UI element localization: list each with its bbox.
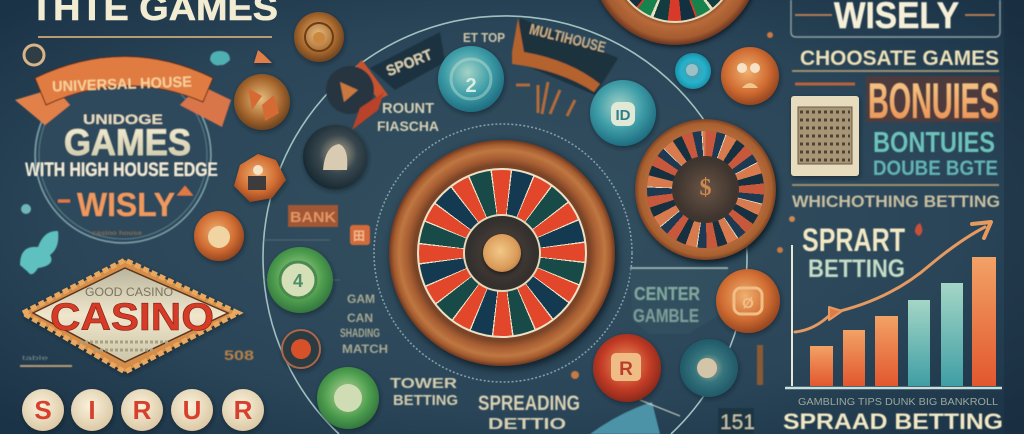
chip R2: R <box>234 395 253 425</box>
label: sprart betting: BETTING <box>808 255 905 283</box>
icon: teal marble left <box>438 46 504 112</box>
label: casino banner left: BANK <box>290 209 336 226</box>
icon: brown token <box>294 12 344 62</box>
icon: green marble: 4 <box>293 271 303 291</box>
chip S <box>22 389 64 431</box>
dark panel: sport <box>356 32 445 100</box>
hub <box>463 214 541 292</box>
chart: spread betting bars <box>785 216 1002 408</box>
main roulette wheel <box>389 140 615 366</box>
icon: orange marble <box>194 211 244 261</box>
top roulette wheel <box>591 0 759 45</box>
bars <box>810 257 996 386</box>
small caption left of sign <box>20 347 254 366</box>
chip R <box>121 389 163 431</box>
title: the games <box>24 0 278 65</box>
arrow: rising trend <box>795 222 991 332</box>
panel: choose games wisely: WITH HIGH HOUSE EDGE <box>25 160 218 181</box>
label: round fiascha <box>377 100 439 134</box>
callout: center gamble <box>630 268 728 334</box>
secondary roulette wheel <box>635 119 776 260</box>
small caption left of sign: 508 <box>224 347 254 363</box>
hub: $ <box>700 175 712 201</box>
panel: choose games wisely: UNIDOGE <box>83 111 163 127</box>
icon: casino marquee sign: GOOD CASINO <box>85 285 173 299</box>
icon: orange gem token <box>234 50 290 130</box>
right edge shade <box>1004 0 1024 434</box>
icon: orange chip <box>234 154 286 202</box>
label: spreading betting: DETTIO <box>488 416 566 433</box>
icon: teal marble right <box>590 80 656 146</box>
chip U: U <box>183 395 201 425</box>
icon: dark orange token <box>326 66 384 130</box>
panel: choose games wisely: WISLY <box>77 186 175 223</box>
streak and device bottom right: 151 <box>720 411 755 434</box>
ring panels and labels <box>264 18 783 434</box>
dark panel: sport: SPORT <box>384 46 435 80</box>
panel: choose games wisely: casino house <box>92 231 143 237</box>
label: et top: ET TOP <box>463 30 505 45</box>
icon: small orange square: 田 <box>353 229 365 243</box>
label: spreading betting: SPREADING <box>478 392 580 415</box>
icon: teal marble left: 2 <box>465 75 477 97</box>
ring marbles <box>267 46 780 429</box>
chip U <box>171 389 213 431</box>
wheel pockets <box>417 168 587 338</box>
icon: orange marble right: Ø <box>742 295 754 312</box>
label: tower betting: BETTING <box>393 392 458 409</box>
icon: green marble <box>267 247 333 313</box>
left ring stats: CAN <box>347 311 373 325</box>
marbles top left <box>194 12 344 261</box>
icon: red marble <box>593 334 661 402</box>
label: round fiascha: ROUNT <box>382 100 434 117</box>
label: casino banner left <box>288 205 338 227</box>
small label dots <box>571 32 783 379</box>
panel: wisely header <box>791 0 1000 211</box>
ribbon banner: UNIVERSAL HOUSE <box>52 74 192 95</box>
left ring stats <box>340 292 388 356</box>
icon: orange face marble <box>721 47 779 105</box>
icon: teal gems <box>20 51 230 274</box>
chip I <box>71 389 113 431</box>
panel: choose games wisely: GAMES <box>64 122 191 163</box>
hub <box>672 156 739 223</box>
chip R2 <box>222 389 264 431</box>
icon: casino marquee sign: CASINO <box>50 296 214 339</box>
chip R: R <box>133 395 152 425</box>
row of letter chips <box>22 389 264 431</box>
icon: small orange square <box>350 225 370 245</box>
chip I: I <box>88 395 96 425</box>
central large ring <box>263 16 747 434</box>
left ring stats: MATCH <box>342 342 388 356</box>
icon: green marble bottom <box>317 367 379 429</box>
icon: casino marquee sign <box>23 260 238 372</box>
panel: choose games wisely <box>15 56 231 243</box>
icon: small cyan marble <box>675 53 711 89</box>
icon: red ring token <box>282 330 320 368</box>
icon: dark marble <box>303 125 367 189</box>
panel: multichoice banner <box>512 18 618 95</box>
small caption left of sign: table <box>22 356 49 362</box>
icon: orange marble right <box>716 269 780 333</box>
scribble glyphs <box>516 82 575 116</box>
label: tower betting <box>390 375 458 409</box>
label: sprart betting: SPRART <box>802 222 905 258</box>
ribbon banner <box>15 56 231 127</box>
panel: multichoice banner: MULTIHOUSE <box>528 21 607 56</box>
footer heading: spread betting: SPRAAD BETTING <box>783 409 1003 434</box>
icon: teal marble right: ID <box>616 107 631 124</box>
chart caption: GAMBLING TIPS DUNK BIG BANKROLL <box>798 397 998 408</box>
label: sprart betting <box>802 222 905 283</box>
heading: betting strip: WHICHOTHING BETTING <box>792 192 1000 211</box>
left ring stats: SHADING <box>340 326 380 340</box>
wheel pockets <box>647 131 764 248</box>
left ring stats: GAM <box>347 292 375 306</box>
icon: red marble: R <box>619 359 633 380</box>
heading: choose games: CHOOSATE GAMES <box>800 47 999 70</box>
label: tower betting: TOWER <box>390 375 457 392</box>
icon: qr style card <box>791 96 859 176</box>
callout: center gamble: GAMBLE <box>633 306 699 326</box>
chip S: S <box>34 395 52 425</box>
callout: center gamble: CENTER <box>634 284 700 304</box>
label: round fiascha: FIASCHA <box>377 118 439 134</box>
streak and device bottom right <box>590 345 763 434</box>
icon: teal dark marble <box>680 339 738 397</box>
sub heading: bonus teal: BONTUIES <box>873 127 995 159</box>
panel: wisely header: DOUBE BGTE <box>873 157 998 180</box>
label: spreading betting <box>478 392 580 433</box>
center knob <box>483 234 521 272</box>
